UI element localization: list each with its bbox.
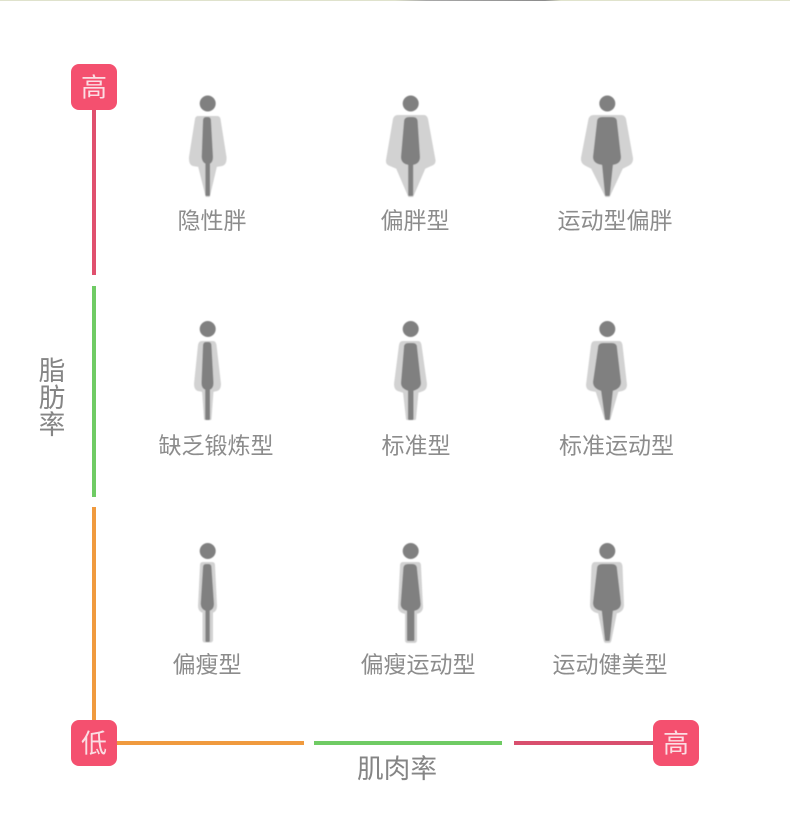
label: standard athletic: 标准运动型 xyxy=(559,432,674,458)
label: underweight: 偏瘦型 xyxy=(172,652,242,678)
figure: bodybuilder xyxy=(591,543,623,642)
figure: lacking exercise xyxy=(195,321,220,419)
label: lean athletic: 偏瘦运动型 xyxy=(360,652,476,678)
label: lacking exercise: 缺乏锻炼型 xyxy=(158,432,274,458)
figure: hidden obesity xyxy=(190,96,226,196)
axis title: body fat rate: 肪 xyxy=(39,383,65,413)
figure: lean athletic xyxy=(399,543,422,642)
axis title: body fat rate: 脂 xyxy=(39,356,65,386)
label: standard: 标准型 xyxy=(382,432,450,458)
label: hidden obesity: 隐性胖 xyxy=(178,208,246,234)
badge: high muscle xyxy=(653,720,699,766)
figure: overweight xyxy=(387,96,435,196)
badge: low: 低 xyxy=(81,728,107,758)
badge: low xyxy=(71,720,117,766)
label: athletic overweight: 运动型偏胖 xyxy=(558,208,672,234)
figure: underweight xyxy=(199,543,216,642)
axis title: body fat rate: 率 xyxy=(39,410,65,440)
label: overweight: 偏胖型 xyxy=(380,208,450,234)
axis title: body fat rate xyxy=(39,356,65,440)
axis title: muscle rate: 肌肉率 xyxy=(357,754,437,784)
vertical axis: body fat rate xyxy=(92,108,96,722)
badge: high fat xyxy=(71,64,117,110)
figure: athletic overweight xyxy=(582,96,632,196)
horizontal axis: muscle rate xyxy=(115,741,655,745)
label: bodybuilder: 运动健美型 xyxy=(552,652,668,678)
badge: high fat: 高 xyxy=(81,72,107,102)
figure: standard athletic xyxy=(587,321,626,419)
badge: high muscle: 高 xyxy=(663,728,689,758)
figure: standard xyxy=(395,321,426,419)
